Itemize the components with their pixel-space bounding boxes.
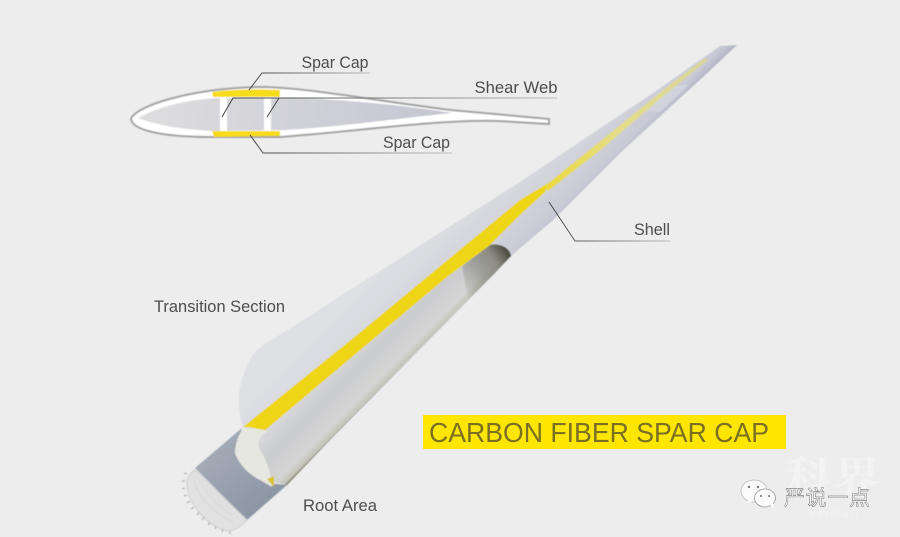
root end cap [187, 470, 247, 531]
leader line: lower spar cap [250, 135, 452, 153]
label: upper spar cap: Spar Cap [302, 53, 368, 72]
wechat account name: 严说一点 [784, 487, 870, 510]
tip section highlight [640, 84, 690, 112]
small yellow mark at root [267, 476, 274, 487]
watermark: SciMall [808, 508, 858, 520]
airfoil core [138, 98, 452, 131]
root end cap rings [194, 480, 233, 522]
inner lobed section end [235, 429, 272, 487]
label: transition section: Transition Section [154, 297, 285, 316]
root bolts [182, 473, 230, 534]
yellow spar cap strip [243, 182, 550, 432]
label: lower spar cap: Spar Cap [383, 133, 450, 152]
upper spar cap [212, 89, 280, 97]
blade shell [239, 45, 737, 485]
label: shear web: Shear Web [474, 78, 558, 97]
label: shell: Shell [634, 220, 670, 239]
lower spar cap [212, 131, 280, 137]
leader line: upper spar cap [249, 73, 370, 90]
watermark: 科界 [786, 454, 880, 505]
title banner: CARBON FIBER SPAR CAP [429, 417, 769, 448]
inner spar body [235, 245, 511, 485]
fading yellow strip to tip [545, 58, 708, 191]
airfoil cross-section diagram [131, 87, 549, 137]
cutaway shadow [462, 245, 511, 300]
shear webs [220, 96, 271, 133]
leader line: shell [549, 202, 670, 241]
blade [182, 45, 737, 534]
label: root area: Root Area [303, 496, 378, 515]
blade root cavity [195, 428, 287, 520]
icon: wechat [741, 480, 776, 509]
leader line: shear web [222, 98, 557, 117]
airfoil outer shell [131, 87, 549, 137]
